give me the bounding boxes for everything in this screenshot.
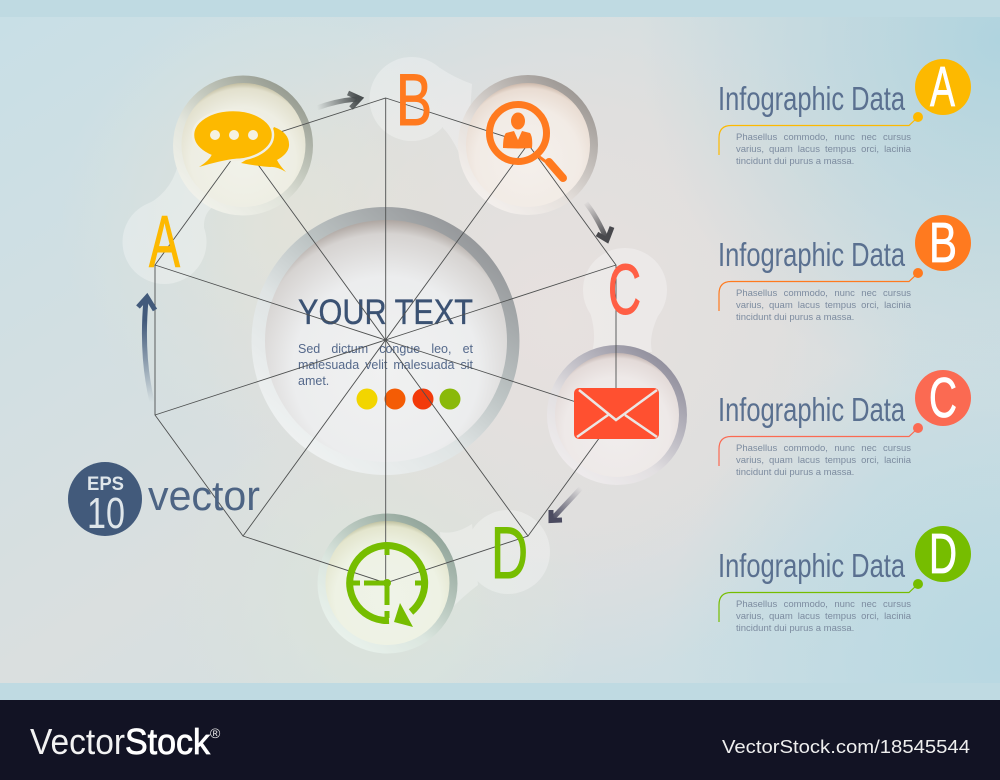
icon: envelope — [574, 388, 659, 439]
info row D: tincidunt dui purus a massa. — [736, 623, 854, 634]
info row D: Phasellus commodo, nunc nec cursus — [736, 599, 911, 610]
letter D: D — [491, 513, 528, 594]
info row D: varius, quam lacus tempus orci, lacinia — [736, 611, 911, 622]
arrow: search to C head — [597, 227, 612, 240]
circle: search — [458, 75, 598, 215]
info row D — [718, 522, 971, 637]
info row B — [718, 211, 971, 326]
letter A: A — [149, 202, 180, 283]
info row D: Infographic Data — [718, 547, 905, 584]
arrow: mail to D — [553, 488, 581, 518]
info row A: A — [930, 55, 955, 119]
info row B: B — [929, 211, 957, 275]
central circle — [252, 207, 520, 475]
central paragraph: amet. — [298, 374, 329, 388]
circle: chat — [173, 76, 313, 216]
info row C: C — [929, 366, 957, 430]
circle: mail — [547, 345, 687, 485]
info row B: varius, quam lacus tempus orci, lacinia — [736, 300, 911, 311]
arrow: search to C — [586, 203, 606, 238]
icon: chat bubbles — [193, 110, 289, 172]
letter C: C — [608, 251, 641, 330]
central paragraph: malesuada velit malesuada sit — [298, 358, 473, 372]
arrow: mail to D head — [551, 510, 562, 520]
letter B: B — [396, 60, 432, 141]
footer bar: ® — [210, 725, 221, 741]
info row A: varius, quam lacus tempus orci, lacinia — [736, 144, 911, 155]
colored dots — [356, 388, 460, 410]
info row A: Infographic Data — [718, 80, 905, 117]
info row C — [718, 366, 971, 481]
arrow: chat to B — [317, 93, 360, 108]
info row B: Infographic Data — [718, 236, 905, 273]
footer bar: Vector — [30, 721, 125, 762]
info row C: Phasellus commodo, nunc nec cursus — [736, 443, 911, 454]
central paragraph — [298, 341, 473, 391]
central heading: YOUR TEXT — [298, 292, 473, 332]
EPS 10 badge: 10 — [87, 489, 125, 538]
info row C: Infographic Data — [718, 391, 905, 428]
footer bar: Stock — [125, 721, 211, 762]
info row C: tincidunt dui purus a massa. — [736, 467, 854, 478]
circle: clock — [318, 514, 458, 654]
EPS 10 badge — [68, 462, 142, 538]
icon: clock — [350, 546, 425, 627]
EPS 10 badge: EPS — [87, 474, 124, 495]
arrow: left upward — [144, 300, 152, 402]
info row A: tincidunt dui purus a massa. — [736, 156, 854, 167]
central paragraph: Sed dictum congue leo, et — [298, 342, 473, 356]
decagon web lines — [155, 98, 616, 583]
info row C: varius, quam lacus tempus orci, lacinia — [736, 455, 911, 466]
arrow: left upward head — [138, 297, 155, 310]
info row D: D — [929, 522, 957, 586]
footer bar — [0, 700, 1000, 780]
footer bar: VectorStock.com/18545544 — [722, 736, 970, 757]
vector label: vector — [148, 472, 260, 519]
info row B: Phasellus commodo, nunc nec cursus — [736, 288, 911, 299]
letter discs and connecting necks — [122, 57, 667, 612]
icon: magnifier with person — [490, 104, 563, 178]
info row A — [718, 55, 971, 170]
info row B: tincidunt dui purus a massa. — [736, 312, 854, 323]
info row A: Phasellus commodo, nunc nec cursus — [736, 132, 911, 143]
